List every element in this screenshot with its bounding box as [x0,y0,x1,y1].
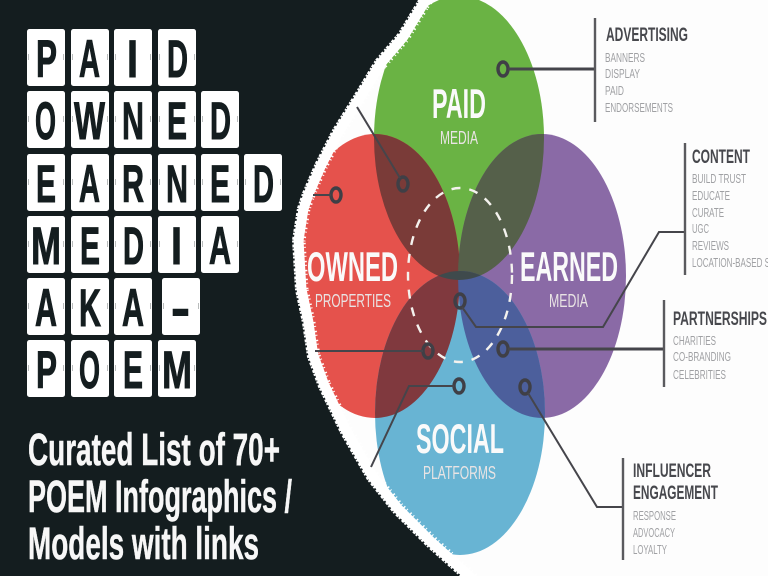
title tiles: EARNED: E [210,155,230,214]
label: earned media: MEDIA [549,291,588,311]
title tiles: MEDIA: D [123,217,144,276]
title tiles: EARNED: R [122,155,144,214]
text block: influencer engagement [633,461,718,557]
label: social platforms: SOCIAL [416,415,504,462]
title tiles: POEM: M [162,341,192,400]
title tiles: POEM [27,340,196,400]
connector: owned-social left [315,344,433,358]
connector: partnerships [498,300,664,387]
title tiles: EARNED: E [36,155,56,214]
title tiles: AKA -: - [171,279,190,338]
label: owned properties: OWNED [307,243,398,290]
title tiles: PAID: P [36,30,57,89]
text block: influencer engagement: ADVOCACY [633,525,675,540]
connector: influencer engagement [520,380,623,560]
title tiles: AKA -: A [35,279,57,338]
text block: advertising: PAID [605,83,624,98]
connector: advertising [498,18,595,122]
dark curved left panel [0,0,475,576]
label: owned properties: PROPERTIES [315,291,391,311]
title tiles: OWNED: E [167,92,187,151]
text block: advertising: DISPLAY [605,66,640,81]
title tiles: MEDIA [27,216,239,276]
label: paid media: PAID [432,80,486,127]
title tiles: AKA -: A [122,279,144,338]
text block: partnerships: CELEBRITIES [673,367,726,382]
circle: earned media [458,134,626,418]
title tiles: POEM: O [79,341,100,400]
label: owned properties [307,243,398,311]
connector: owned left stub [313,188,341,202]
title tiles: PAID [27,29,196,89]
text block: content [692,147,768,270]
overlap: paid and owned [374,134,459,276]
circle labels [307,80,618,483]
connector: content [455,143,685,327]
title tiles: EARNED [27,154,282,214]
overlap: paid and social [438,271,481,280]
text block: advertising: ENDORSEMENTS [605,100,673,115]
title tiles: MEDIA: I [171,217,182,276]
connector: owned-paid diagonal [357,107,408,191]
title tiles: OWNED: N [122,92,144,151]
title tiles: AKA -: K [79,279,101,338]
title tiles: MEDIA: M [31,217,61,276]
title tiles: PAID: I [127,30,138,89]
overlap: owned and social [375,276,459,418]
label: earned media [520,243,618,311]
label: earned media: EARNED [520,243,618,290]
title tiles: OWNED [27,91,239,151]
text block: content: UGC [692,221,709,236]
title tiles: MEDIA: A [209,217,231,276]
title tiles: MEDIA: E [80,217,100,276]
circle: owned properties [290,134,460,418]
text block: content: EDUCATE [692,188,730,203]
label: social platforms: PLATFORMS [423,463,496,483]
title tiles: PAID: A [79,30,100,89]
title tiles: POEM: P [36,341,57,400]
title tiles: PAID: D [167,30,188,89]
text block: influencer engagement: RESPONSE [633,508,676,523]
venn diagram [290,0,626,555]
text block: influencer engagement: LOYALTY [633,542,667,557]
title tiles: OWNED: W [74,92,105,151]
subtitle: Models with links [28,518,259,569]
text block: partnerships: CO-BRANDING [673,349,731,364]
title tiles: OWNED: O [35,92,56,151]
title tiles: AKA - [27,278,200,338]
label: paid media: MEDIA [440,128,478,148]
text block: influencer engagement: INFLUENCER [633,461,711,482]
text block: advertising: BANNERS [605,50,645,65]
subtitle: POEM Infographics / [28,471,292,522]
label: paid media [432,80,486,148]
title tiles: OWNED: D [210,92,231,151]
title tiles: EARNED: D [253,155,274,214]
connector: social [371,379,464,467]
subtitle [28,424,292,569]
title tiles: EARNED: N [166,155,188,214]
title tiles: EARNED: A [79,155,100,214]
title tiles: POEM: E [123,341,143,400]
dashed center ring [408,188,512,362]
overlap: earned and social [458,271,545,418]
text block: advertising [605,25,688,115]
text block: influencer engagement: ENGAGEMENT [633,483,718,504]
text block: content: CURATE [692,205,724,220]
circle: paid media [374,0,544,280]
text block: partnerships: CHARITIES [673,333,716,348]
text block: partnerships [673,309,767,382]
overlap: paid and earned [458,134,544,276]
subtitle: Curated List of 70+ [28,424,280,475]
text block: advertising: ADVERTISING [606,25,688,46]
label: social platforms [416,415,504,483]
circle: social platforms [375,271,545,555]
text block: content: REVIEWS [692,238,729,253]
